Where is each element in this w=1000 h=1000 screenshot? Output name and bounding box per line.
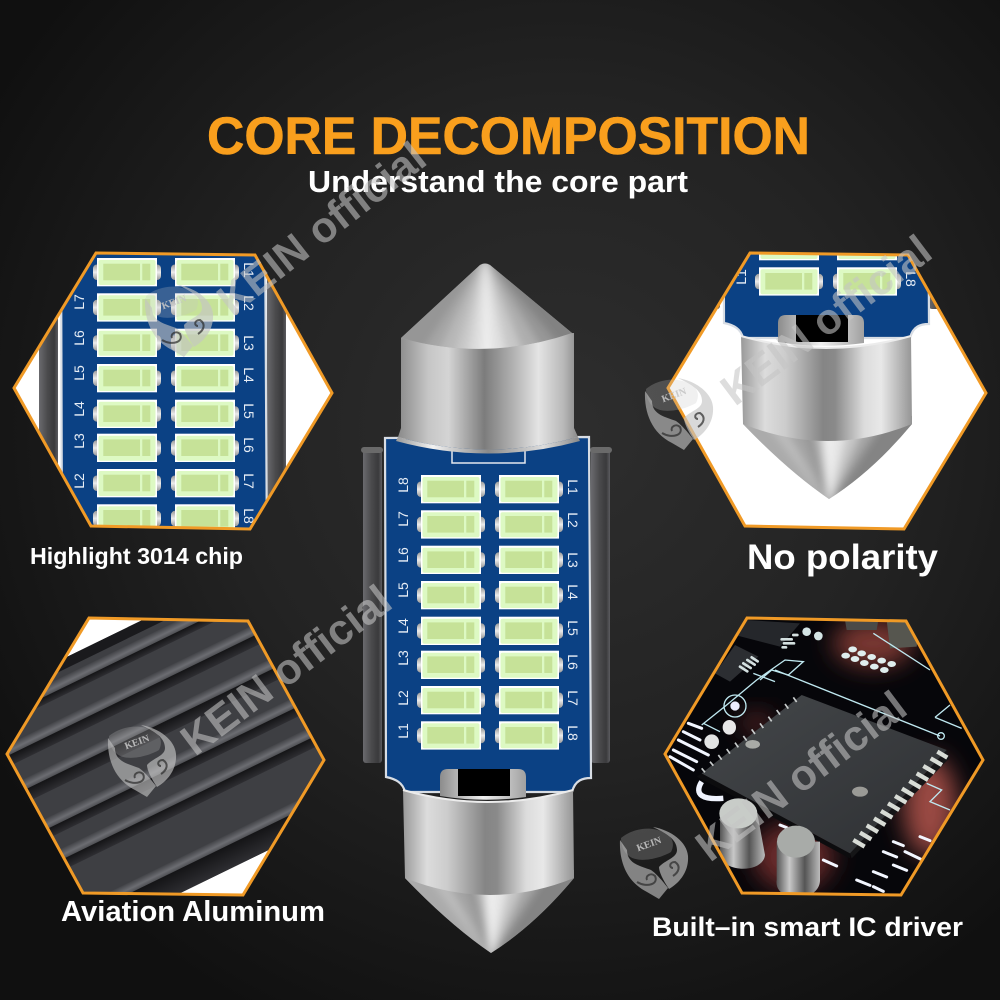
circuit board with LED chips	[361, 437, 612, 792]
panel: highlight 3014 chip hexagon: L2	[71, 473, 87, 489]
panel: highlight 3014 chip hexagon: L7	[71, 294, 87, 310]
panel: highlight 3014 chip hexagon: L8	[241, 508, 257, 524]
panel: highlight 3014 chip hexagon: L5	[71, 365, 87, 381]
watermark: bottom right: KEIN official	[687, 682, 916, 871]
watermark: bottom left: KEIN official	[172, 576, 401, 765]
panel: highlight 3014 chip hexagon: L4	[241, 367, 257, 383]
bottom metal cap	[340, 769, 640, 960]
watermark: top right	[645, 226, 941, 450]
panel: central festoon bulb	[330, 255, 650, 960]
panel: highlight 3014 chip hexagon: L7	[241, 473, 257, 489]
panel: highlight 3014 chip hexagon	[12, 252, 334, 530]
label: highlight chip: Highlight 3014 chip	[30, 543, 243, 569]
chip labels right column: L2	[565, 512, 581, 528]
panel: highlight 3014 chip hexagon: L4	[71, 401, 87, 417]
panel: no polarity hexagon	[666, 252, 988, 530]
chip labels right column: L5	[565, 620, 581, 636]
chip labels left column	[395, 477, 411, 739]
watermark: bottom right: KEIN	[635, 835, 664, 854]
top metal cap	[330, 255, 650, 454]
chip labels right column: L1	[565, 479, 581, 495]
watermark: top left: KEIN	[160, 293, 189, 312]
chip labels left column: L2	[395, 690, 411, 706]
chip labels left column: L1	[395, 723, 411, 739]
chip labels left column: L6	[395, 547, 411, 563]
label: no polarity: No polarity	[747, 538, 939, 577]
chip labels left column: L5	[395, 582, 411, 598]
chip labels left column: L8	[395, 477, 411, 493]
chip labels right column: L7	[565, 690, 581, 706]
watermark: top right: KEIN	[660, 386, 689, 405]
watermark: top right: KEIN official	[712, 226, 941, 415]
chip labels right column: L8	[565, 725, 581, 741]
panel: highlight 3014 chip hexagon: L1	[241, 262, 257, 278]
label: IC driver: Built–in smart IC driver	[652, 912, 964, 942]
chip labels left column: L7	[395, 511, 411, 527]
panel: aviation aluminum hexagon	[5, 616, 326, 896]
watermark: top left: KEIN official	[209, 133, 435, 325]
subtitle: Understand the core part	[308, 164, 688, 199]
panel: smart IC driver hexagon	[663, 616, 985, 896]
chip labels right column: L6	[565, 654, 581, 670]
panel: highlight 3014 chip hexagon: L6	[71, 330, 87, 346]
title: CORE DECOMPOSITION	[207, 107, 810, 166]
panel: no polarity hexagon: L1	[733, 269, 749, 285]
chip labels left column: L3	[395, 650, 411, 666]
panel: no polarity hexagon: L8	[903, 271, 919, 287]
panel: highlight 3014 chip hexagon: L6	[241, 437, 257, 453]
watermark: bottom left	[108, 576, 401, 797]
panel: highlight 3014 chip hexagon: L5	[241, 403, 257, 419]
panel: highlight 3014 chip hexagon: L2	[241, 295, 257, 311]
label: aviation aluminum: Aviation Aluminum	[61, 896, 325, 928]
chip labels right column: L4	[565, 584, 581, 600]
panel: highlight 3014 chip hexagon: L3	[71, 433, 87, 449]
watermark: top left	[145, 133, 435, 357]
chip labels right column: L3	[565, 552, 581, 568]
watermark: bottom right	[620, 682, 916, 899]
chip labels left column: L4	[395, 618, 411, 634]
watermark: bottom left: KEIN	[123, 733, 152, 752]
panel: highlight 3014 chip hexagon: L3	[241, 335, 257, 351]
chip labels right column	[565, 479, 581, 741]
